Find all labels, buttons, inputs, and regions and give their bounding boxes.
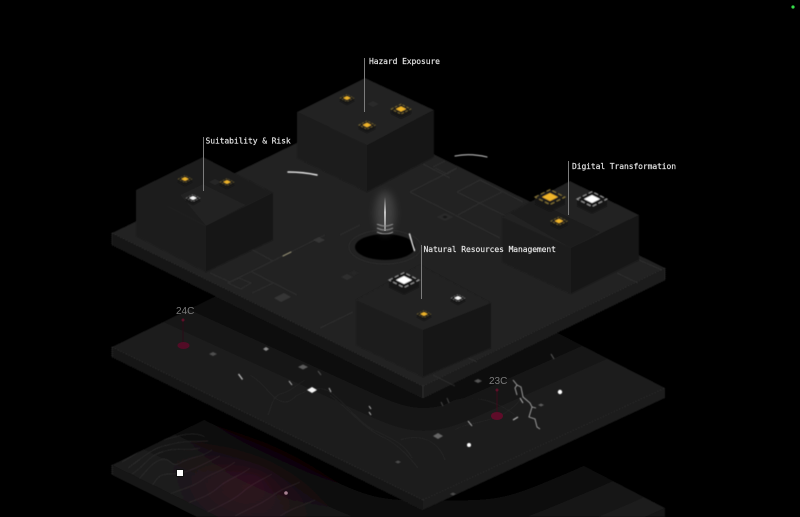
chips: Hazard Exposure	[340, 94, 411, 133]
lightning crack	[513, 380, 540, 429]
temperature pin 23C	[489, 376, 507, 420]
label: Hazard Exposure	[364, 57, 440, 112]
chips: Natural Resources Management	[389, 272, 465, 321]
dark hole with beam	[349, 191, 421, 264]
label: Natural Resources Management: Natural Resources Management	[424, 245, 556, 254]
chips: Suitability & Risk	[178, 175, 234, 205]
temperature pin 24C	[176, 306, 194, 349]
layer 3: terrain slab	[111, 420, 666, 517]
block: Natural Resources Management	[356, 265, 491, 377]
terrain marker: pink dot	[284, 491, 288, 495]
layer 2: weather slab	[111, 296, 666, 510]
label: Digital Transformation	[568, 161, 676, 215]
orbit arc strokes	[283, 150, 487, 256]
label: Suitability & Risk	[204, 136, 291, 191]
platform grid lines	[210, 161, 662, 386]
terrain marker: white square	[176, 470, 184, 476]
status dot	[791, 5, 795, 9]
layer 1: platform slab	[112, 115, 665, 398]
label: Digital Transformation: Digital Transformation	[572, 162, 676, 171]
chips: Digital Transformation	[535, 190, 607, 229]
temperature pin 24C: 24C	[176, 306, 194, 317]
block: Digital Transformation	[502, 181, 639, 294]
label: Hazard Exposure: Hazard Exposure	[369, 57, 440, 66]
weather markers	[209, 347, 562, 496]
label: Natural Resources Management	[422, 245, 556, 299]
label: Suitability & Risk: Suitability & Risk	[206, 136, 291, 146]
temperature pin 23C: 23C	[489, 376, 507, 387]
platform grey tiles	[274, 213, 453, 302]
block: Hazard Exposure	[297, 78, 434, 192]
weather dashes	[238, 354, 554, 426]
block: Suitability & Risk	[136, 157, 273, 272]
